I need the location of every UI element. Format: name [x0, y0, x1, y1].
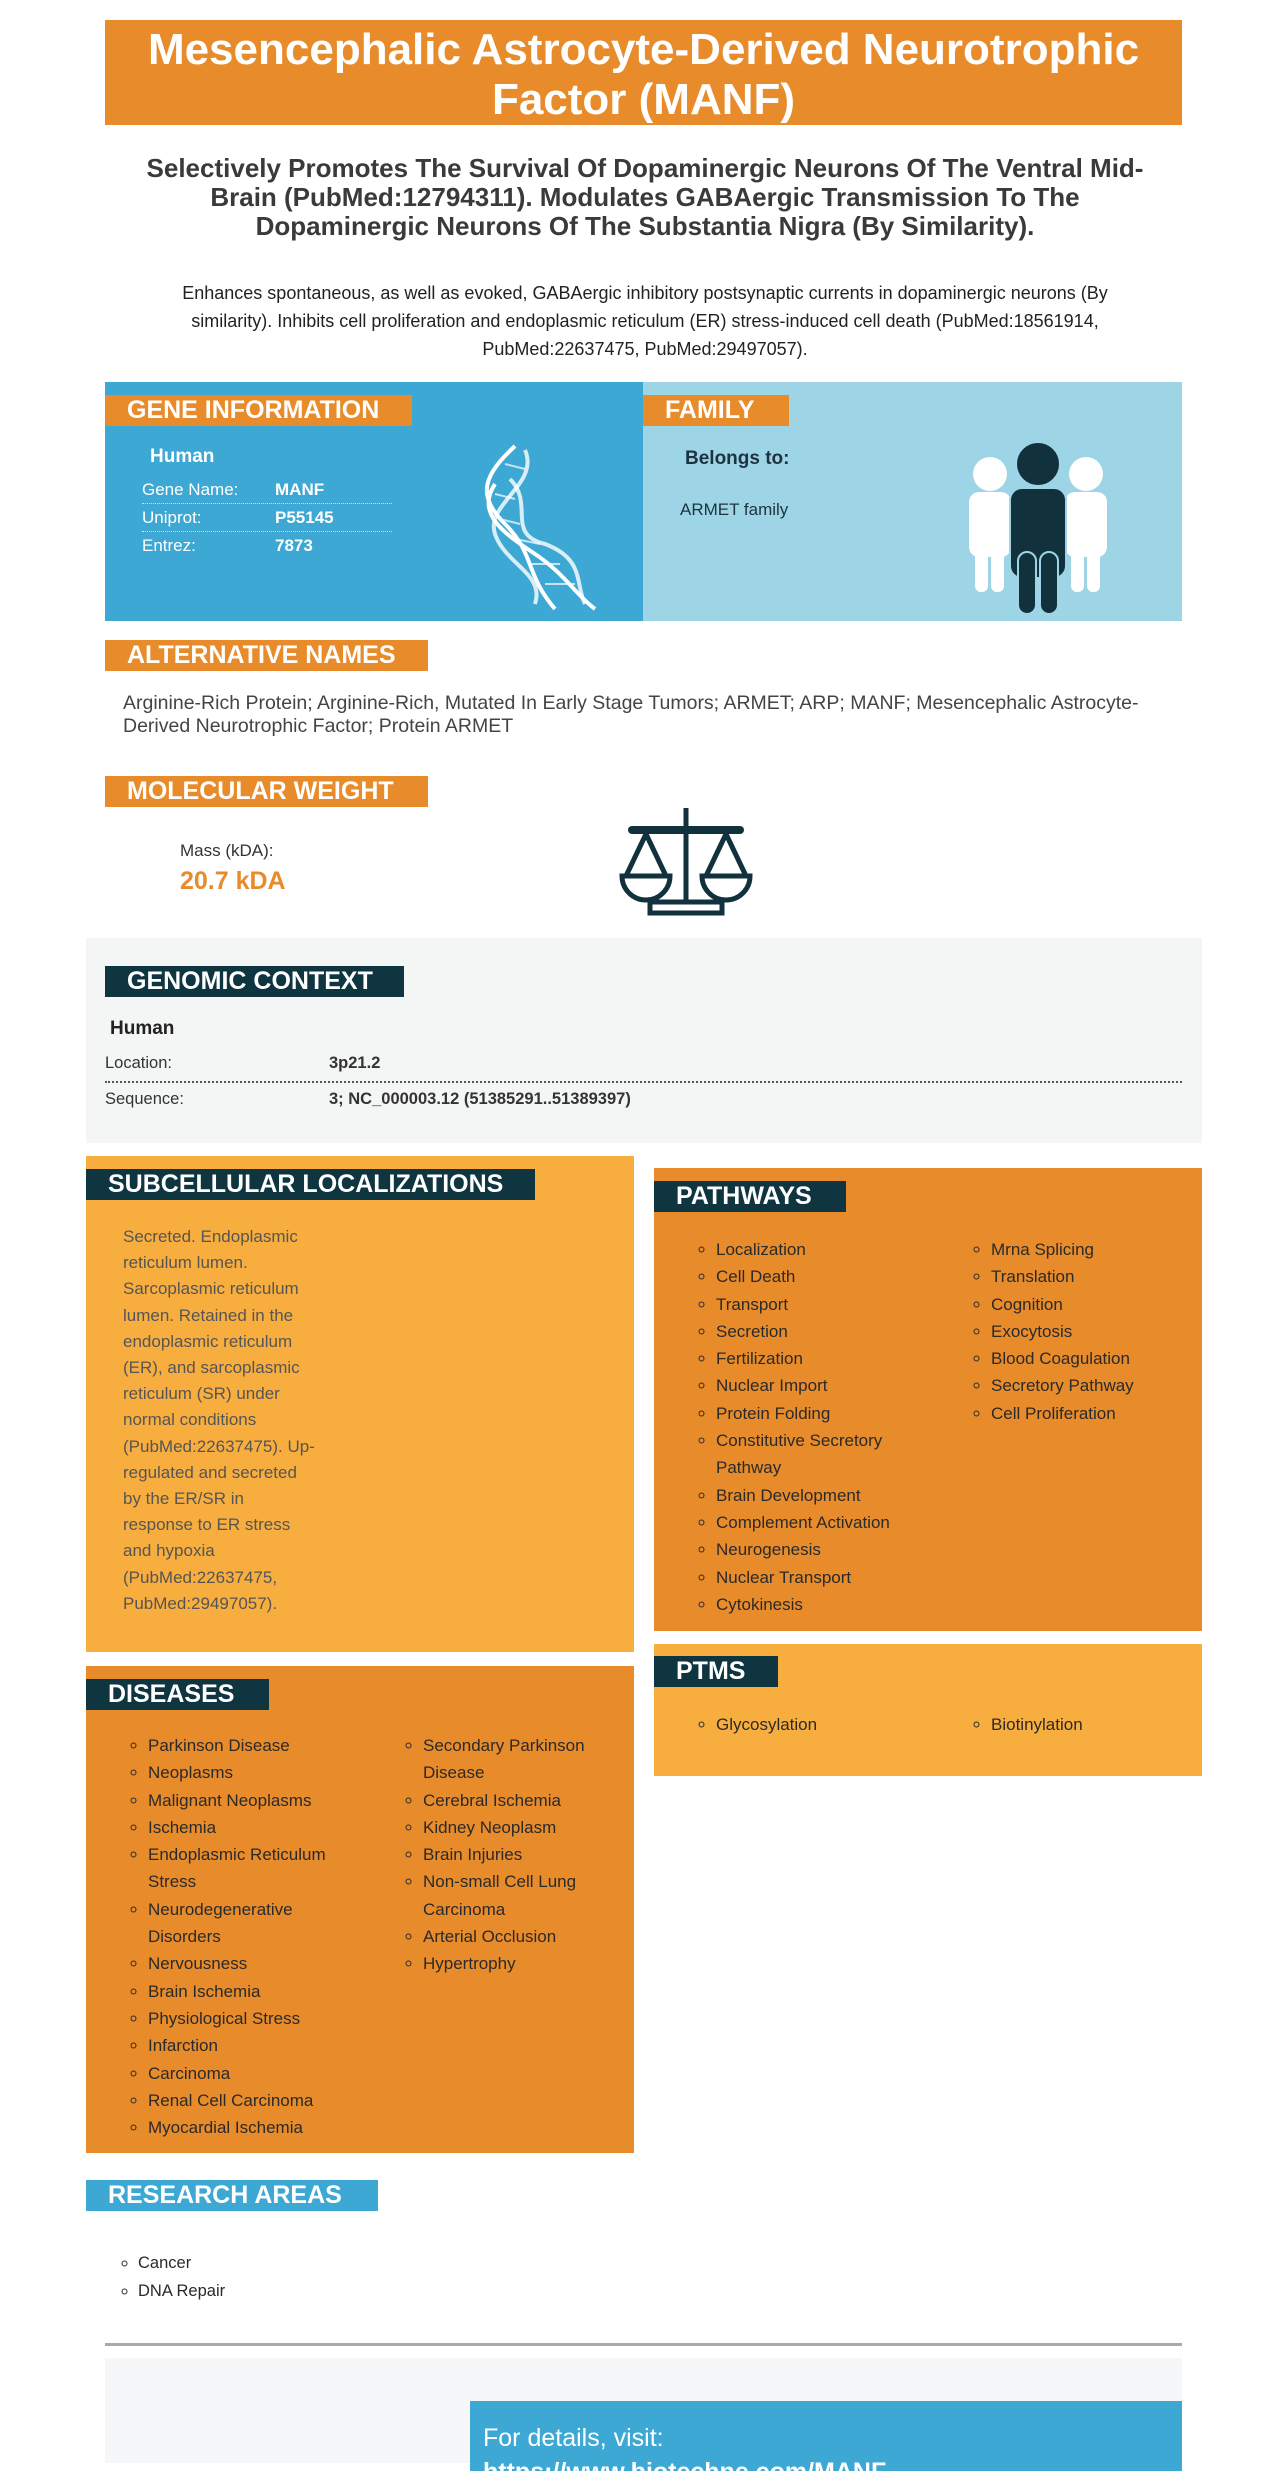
diseases col 1: Infarction	[148, 2036, 218, 2055]
heading: genomic context: GENOMIC CONTEXT	[127, 967, 373, 995]
species: Human	[110, 1018, 174, 1039]
title: Mesencephalic Astrocyte-Derived Neurotrophic Factor (MANF)	[148, 25, 1139, 124]
pathways list col 1	[698, 1240, 890, 1614]
pathways list col 1: Constitutive Secretory Pathway	[716, 1431, 882, 1477]
gene info table: Human	[150, 446, 214, 467]
panel: genomic context	[86, 938, 1202, 1143]
pathways list col 1: Localization	[716, 1240, 806, 1259]
heading: gene information: GENE INFORMATION	[127, 396, 379, 424]
diseases col 1: Neurodegenerative Disorders	[148, 1900, 293, 1946]
diseases col 2: Non-small Cell Lung Carcinoma	[423, 1872, 576, 1919]
callout: details link	[470, 2401, 1182, 2471]
research areas list: DNA Repair	[138, 2282, 225, 2300]
icon: people	[969, 443, 1107, 613]
ptms col 1: Glycosylation	[716, 1715, 817, 1734]
belongs to: Belongs to:	[685, 448, 790, 469]
description paragraph: Enhances spontaneous, as well as evoked, GABAergic inhibitory postsynaptic currents in dopaminergic neurons (By similarity). Inhibits cell proliferation and endoplasmic reticulum (ER) stress-induced cell death (PubMed:18561914, PubMed:22637475, PubMed:29497057).	[182, 283, 1108, 359]
pathways list col 2: Mrna Splicing	[991, 1240, 1094, 1259]
panel: ptms	[654, 1644, 1202, 1776]
location row: 3p21.2	[329, 1054, 380, 1072]
gene info table: MANF	[275, 480, 324, 499]
pathways list col 1: Fertilization	[716, 1349, 803, 1368]
panel: subcellular localizations	[86, 1156, 634, 1652]
panel: gene information	[105, 382, 643, 621]
diseases col 1: Renal Cell Carcinoma	[148, 2091, 313, 2110]
heading: subcellular localizations: SUBCELLULAR LOCALIZATIONS	[108, 1170, 503, 1198]
text: https://www.biotechne.com/MANF	[483, 2458, 886, 2486]
diseases col 1: Brain Ischemia	[148, 1982, 260, 2001]
family name: ARMET family	[680, 500, 788, 519]
diseases col 1: Neoplasms	[148, 1763, 233, 1782]
diseases col 1: Malignant Neoplasms	[148, 1791, 311, 1810]
diseases col 2	[406, 1736, 585, 1973]
pathways list col 2: Exocytosis	[991, 1322, 1072, 1341]
heading: family	[643, 395, 789, 426]
gene info table	[142, 446, 392, 555]
heading: alternative names: ALTERNATIVE NAMES	[127, 641, 396, 669]
pathways list col 1: Cytokinesis	[716, 1595, 803, 1614]
diseases col 1: Parkinson Disease	[148, 1736, 290, 1755]
pathways list col 1: Complement Activation	[716, 1513, 890, 1532]
research areas list	[122, 2254, 225, 2300]
diseases col 1: Physiological Stress	[148, 2009, 300, 2028]
heading: family: FAMILY	[665, 396, 754, 424]
diseases col 2: Hypertrophy	[423, 1954, 516, 1973]
pathways list col 2: Secretory Pathway	[991, 1376, 1134, 1395]
diseases col 1: Carcinoma	[148, 2064, 230, 2083]
pathways list col 1: Cell Death	[716, 1267, 795, 1286]
heading: ptms	[654, 1656, 778, 1687]
gene info table: 7873	[275, 536, 313, 555]
pathways list col 1: Nuclear Transport	[716, 1568, 851, 1587]
pathways list col 2: Blood Coagulation	[991, 1349, 1130, 1368]
gene info table: Gene Name:	[142, 480, 238, 499]
panel: pathways	[654, 1168, 1202, 1631]
heading: diseases: DISEASES	[108, 1680, 234, 1708]
diseases col 1: Nervousness	[148, 1954, 247, 1973]
mass label: Mass (kDA):	[180, 841, 274, 860]
diseases col 1: Ischemia	[148, 1818, 216, 1837]
pathways list col 1: Nuclear Import	[716, 1376, 827, 1395]
gene info table: Entrez:	[142, 536, 196, 555]
diseases col 2: Arterial Occlusion	[423, 1927, 556, 1946]
localization text: Secreted. Endoplasmic reticulum lumen. Sarcoplasmic reticulum lumen. Retained in the endoplasmic reticulum (ER), and sarcoplasmic reticulum (SR) under normal conditions (PubMed:22637475). Up-regulated and secreted by the ER/SR in response to ER stress and hypoxia (PubMed:22637475, PubMed:29497057).	[123, 1227, 315, 1613]
diseases col 2: Brain Injuries	[423, 1845, 522, 1864]
diseases col 1	[130, 1736, 326, 2137]
location row	[105, 1054, 1182, 1083]
alternative names text: Arginine-Rich Protein; Arginine-Rich, Mutated In Early Stage Tumors; ARMET; ARP; MANF; Mesencephalic Astrocyte-Derived Neurotrophic Factor; Protein ARMET	[123, 692, 1138, 737]
heading: molecular weight: MOLECULAR WEIGHT	[127, 777, 394, 805]
gene info table: Uniprot:	[142, 508, 202, 527]
pathways list col 2	[974, 1240, 1134, 1423]
sequence row	[105, 1090, 631, 1108]
heading: pathways	[654, 1181, 846, 1212]
sequence row: Sequence:	[105, 1090, 184, 1108]
footer panel	[105, 2358, 1182, 2463]
diseases col 2: Secondary Parkinson Disease	[423, 1736, 585, 1782]
ptms col 2: Biotinylation	[991, 1715, 1083, 1734]
panel: diseases	[86, 1666, 634, 2153]
icon: scales	[620, 808, 752, 916]
heading: diseases	[86, 1679, 269, 1710]
heading: ptms: PTMS	[676, 1657, 745, 1685]
heading: research areas: RESEARCH AREAS	[108, 2181, 342, 2209]
heading: pathways: PATHWAYS	[676, 1182, 812, 1210]
location row: Location:	[105, 1054, 172, 1072]
pathways list col 1: Brain Development	[716, 1486, 861, 1505]
pathways list col 1: Transport	[716, 1295, 788, 1314]
pathways list col 1: Neurogenesis	[716, 1540, 821, 1559]
callout: details link: For details, visit:	[483, 2424, 664, 2452]
gene info table: P55145	[275, 508, 334, 527]
subtitle: Selectively Promotes The Survival Of Dopaminergic Neurons Of The Ventral Mid-Brain (PubMed:12794311). Modulates GABAergic Transmission To The Dopaminergic Neurons Of The Substantia Nigra (By Similarity).	[147, 153, 1143, 241]
diseases col 2: Cerebral Ischemia	[423, 1791, 561, 1810]
diseases col 1: Endoplasmic Reticulum Stress	[148, 1845, 326, 1891]
mass value: 20.7 kDA	[180, 867, 286, 895]
diseases col 1: Myocardial Ischemia	[148, 2118, 303, 2137]
pathways list col 2: Translation	[991, 1267, 1074, 1286]
pathways list col 1: Protein Folding	[716, 1404, 830, 1423]
icon: dna	[484, 444, 596, 611]
panel: family	[643, 382, 1182, 621]
pathways list col 2: Cognition	[991, 1295, 1063, 1314]
research areas list: Cancer	[138, 2254, 191, 2272]
diseases col 2: Kidney Neoplasm	[423, 1818, 556, 1837]
pathways list col 1: Secretion	[716, 1322, 788, 1341]
pathways list col 2: Cell Proliferation	[991, 1404, 1116, 1423]
sequence row: 3; NC_000003.12 (51385291..51389397)	[329, 1090, 631, 1108]
